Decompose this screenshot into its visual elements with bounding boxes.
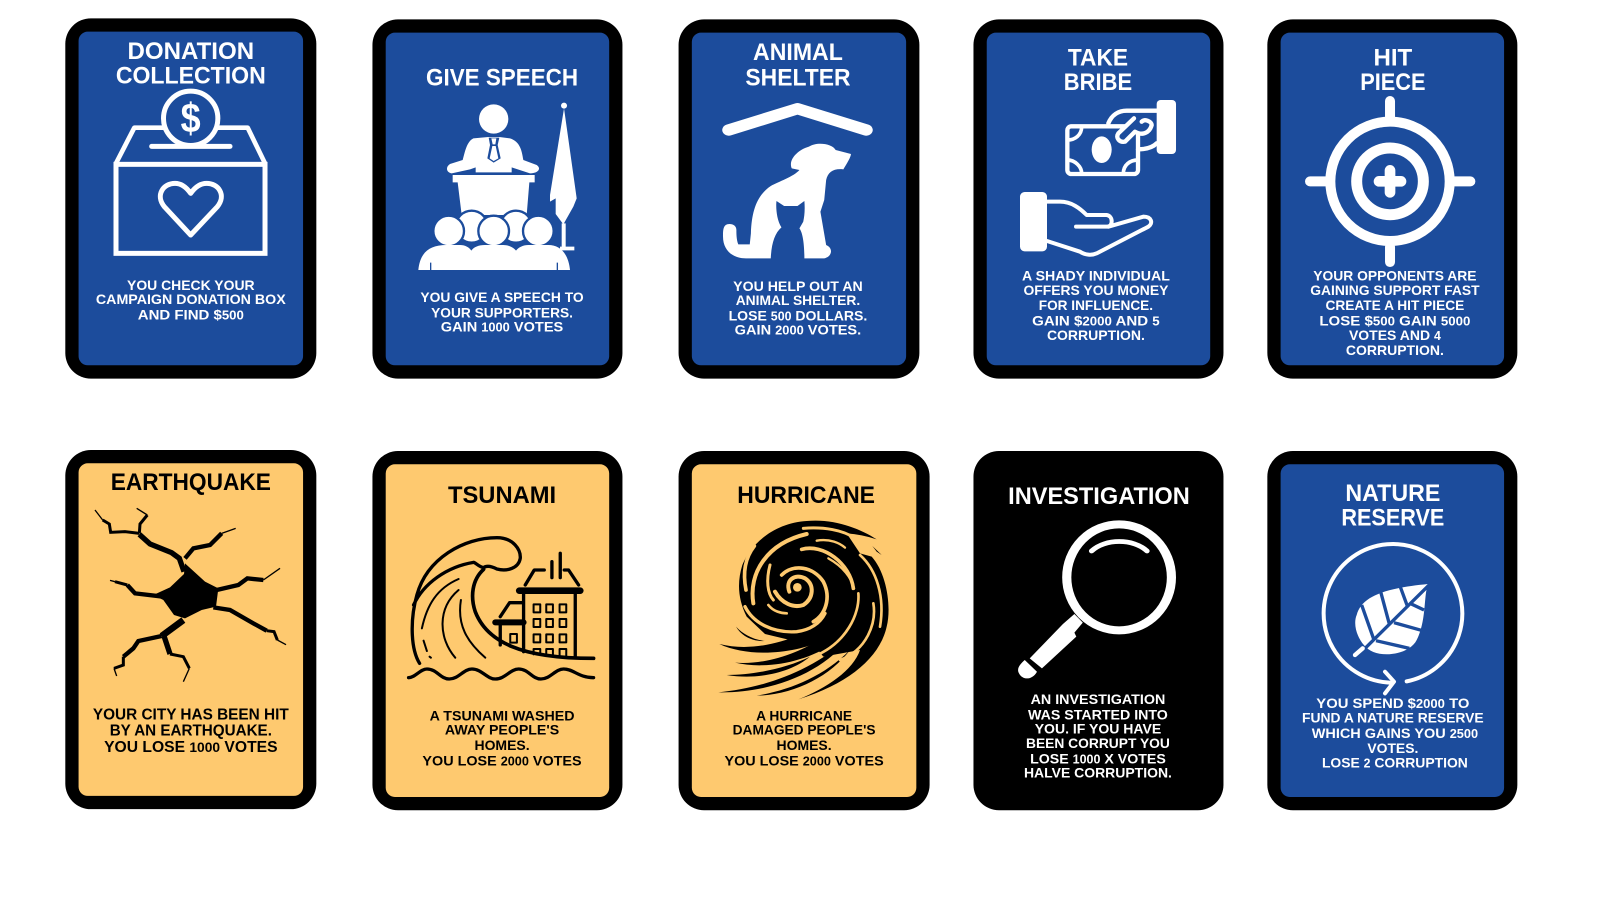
body text: ANIMAL SHELTER. [736, 293, 860, 309]
icon: target crosshair [1310, 101, 1470, 262]
icon: leaf in circular arrow [1324, 544, 1462, 693]
body text: LOSE 1000 X VOTES [1030, 751, 1166, 767]
card frame [65, 450, 316, 809]
body text [1310, 269, 1480, 359]
body text [422, 708, 582, 769]
body text: CAMPAIGN DONATION BOX [96, 292, 286, 308]
body text: YOUR CITY HAS BEEN HIT [93, 706, 289, 723]
body text: FUND A NATURE RESERVE [1302, 710, 1484, 726]
body text: LOSE $500 GAIN 5000 [1319, 314, 1470, 330]
body text: WAS STARTED INTO [1028, 707, 1168, 723]
body text: GAIN $2000 AND 5 [1032, 314, 1160, 330]
heading: ANIMAL [753, 39, 843, 66]
heading: GIVE SPEECH [426, 65, 578, 92]
card frame [679, 451, 930, 810]
heading: INVESTIGATION [1008, 483, 1190, 510]
heading: TSUNAMI [448, 482, 556, 509]
panel: earthquake card [65, 450, 316, 809]
body text: A SHADY INDIVIDUAL [1022, 269, 1170, 285]
body text: YOU CHECK YOUR [127, 278, 255, 294]
body text: GAIN 2000 VOTES. [735, 323, 861, 339]
body text: HOMES. [777, 738, 832, 754]
panel: donation collection card [65, 18, 316, 379]
icon: hurricane swirl [718, 521, 889, 699]
heading [1341, 480, 1444, 532]
body text [1302, 696, 1484, 771]
body text: YOU SPEND $ 2000 TO [1316, 696, 1469, 712]
card frame [372, 19, 622, 379]
body text [729, 279, 867, 339]
heading: RESERVE [1341, 505, 1444, 532]
body text: BEEN CORRUPT YOU [1026, 736, 1170, 752]
body text: LOSE 500 DOLLARS. [729, 308, 867, 324]
body text: OFFERS YOU MONEY [1023, 283, 1169, 299]
body text [1022, 269, 1170, 344]
body text: GAIN 1000 VOTES [441, 320, 563, 336]
heading: SHELTER [745, 65, 851, 92]
panel: animal shelter card [679, 19, 919, 379]
body text: GAINING SUPPORT FAST [1310, 283, 1480, 299]
body text [420, 290, 584, 336]
body text: YOUR SUPPORTERS. [431, 305, 573, 321]
body text: YOUR OPPONENTS ARE [1313, 269, 1477, 285]
icon: donation box [116, 91, 265, 253]
body text: YOU LOSE 2000 VOTES [724, 753, 884, 769]
panel: hurricane card [679, 451, 930, 810]
icon: ground crack [95, 508, 286, 682]
body text: VOTES. [1367, 741, 1418, 757]
card frame [372, 451, 622, 810]
heading: COLLECTION [116, 63, 266, 90]
body text: FOR INFLUENCE. [1039, 298, 1153, 314]
body text: A TSUNAMI WASHED [430, 708, 574, 724]
heading: TAKE [1068, 44, 1128, 71]
body text: AND FIND $ 500 [138, 307, 244, 323]
heading: PIECE [1360, 69, 1426, 96]
body text: BY AN EARTHQUAKE. [110, 723, 272, 740]
icon: wave and buildings [409, 538, 594, 679]
card frame [679, 19, 919, 379]
icon: hands exchanging money [1020, 100, 1176, 255]
body text: AN INVESTIGATION [1031, 692, 1165, 708]
body text: CREATE A HIT PIECE [1326, 298, 1464, 314]
card frame [1267, 19, 1517, 379]
panel: tsunami card [372, 451, 622, 810]
icon: magnifying glass [1018, 524, 1171, 678]
body text: DAMAGED PEOPLE'S [733, 723, 876, 739]
body text: A HURRICANE [756, 708, 852, 724]
body text: AWAY PEOPLE'S [445, 723, 559, 739]
heading: EARTHQUAKE [111, 469, 271, 496]
heading: HIT [1373, 44, 1413, 71]
heading [1064, 44, 1132, 96]
heading: DONATION [128, 38, 254, 65]
body text: CORRUPTION. [1346, 343, 1444, 359]
body text: LOSE 2 CORRUPTION [1322, 755, 1468, 771]
body text: WHICH GAINS YOU 2500 [1312, 726, 1478, 742]
heading: BRIBE [1064, 69, 1132, 96]
body text [96, 278, 286, 323]
body text: VOTES AND 4 [1349, 328, 1441, 344]
icon: donation box: $ [181, 95, 201, 142]
body text [1024, 692, 1172, 782]
icon: roof over dog and cat [723, 109, 866, 258]
heading [745, 39, 851, 92]
body text: HOMES. [474, 738, 530, 754]
panel: nature reserve card [1267, 451, 1517, 810]
card frame [1267, 451, 1517, 810]
heading [1360, 44, 1426, 96]
card frame [65, 18, 316, 379]
panel: hit piece card [1267, 19, 1517, 379]
heading: HURRICANE [737, 482, 875, 509]
card frame [973, 451, 1223, 810]
panel: investigation card [973, 451, 1223, 810]
card frame [973, 19, 1223, 379]
body text [93, 706, 289, 756]
icon: speaker at podium with audience and flag [418, 103, 577, 270]
panel: give speech card [372, 19, 622, 379]
body text: YOU LOSE 1000 VOTES [104, 739, 278, 756]
panel: take bribe card [973, 19, 1223, 379]
body text: CORRUPTION. [1047, 328, 1145, 344]
body text: HALVE CORRUPTION. [1024, 766, 1172, 782]
body text: YOU. IF YOU HAVE [1035, 722, 1161, 738]
body text: YOU GIVE A SPEECH TO [420, 290, 584, 306]
body text [724, 708, 884, 769]
body text: YOU LOSE 2000 VOTES [422, 753, 582, 769]
heading: NATURE [1345, 480, 1440, 507]
body text: YOU HELP OUT AN [733, 279, 863, 295]
heading [116, 38, 266, 90]
